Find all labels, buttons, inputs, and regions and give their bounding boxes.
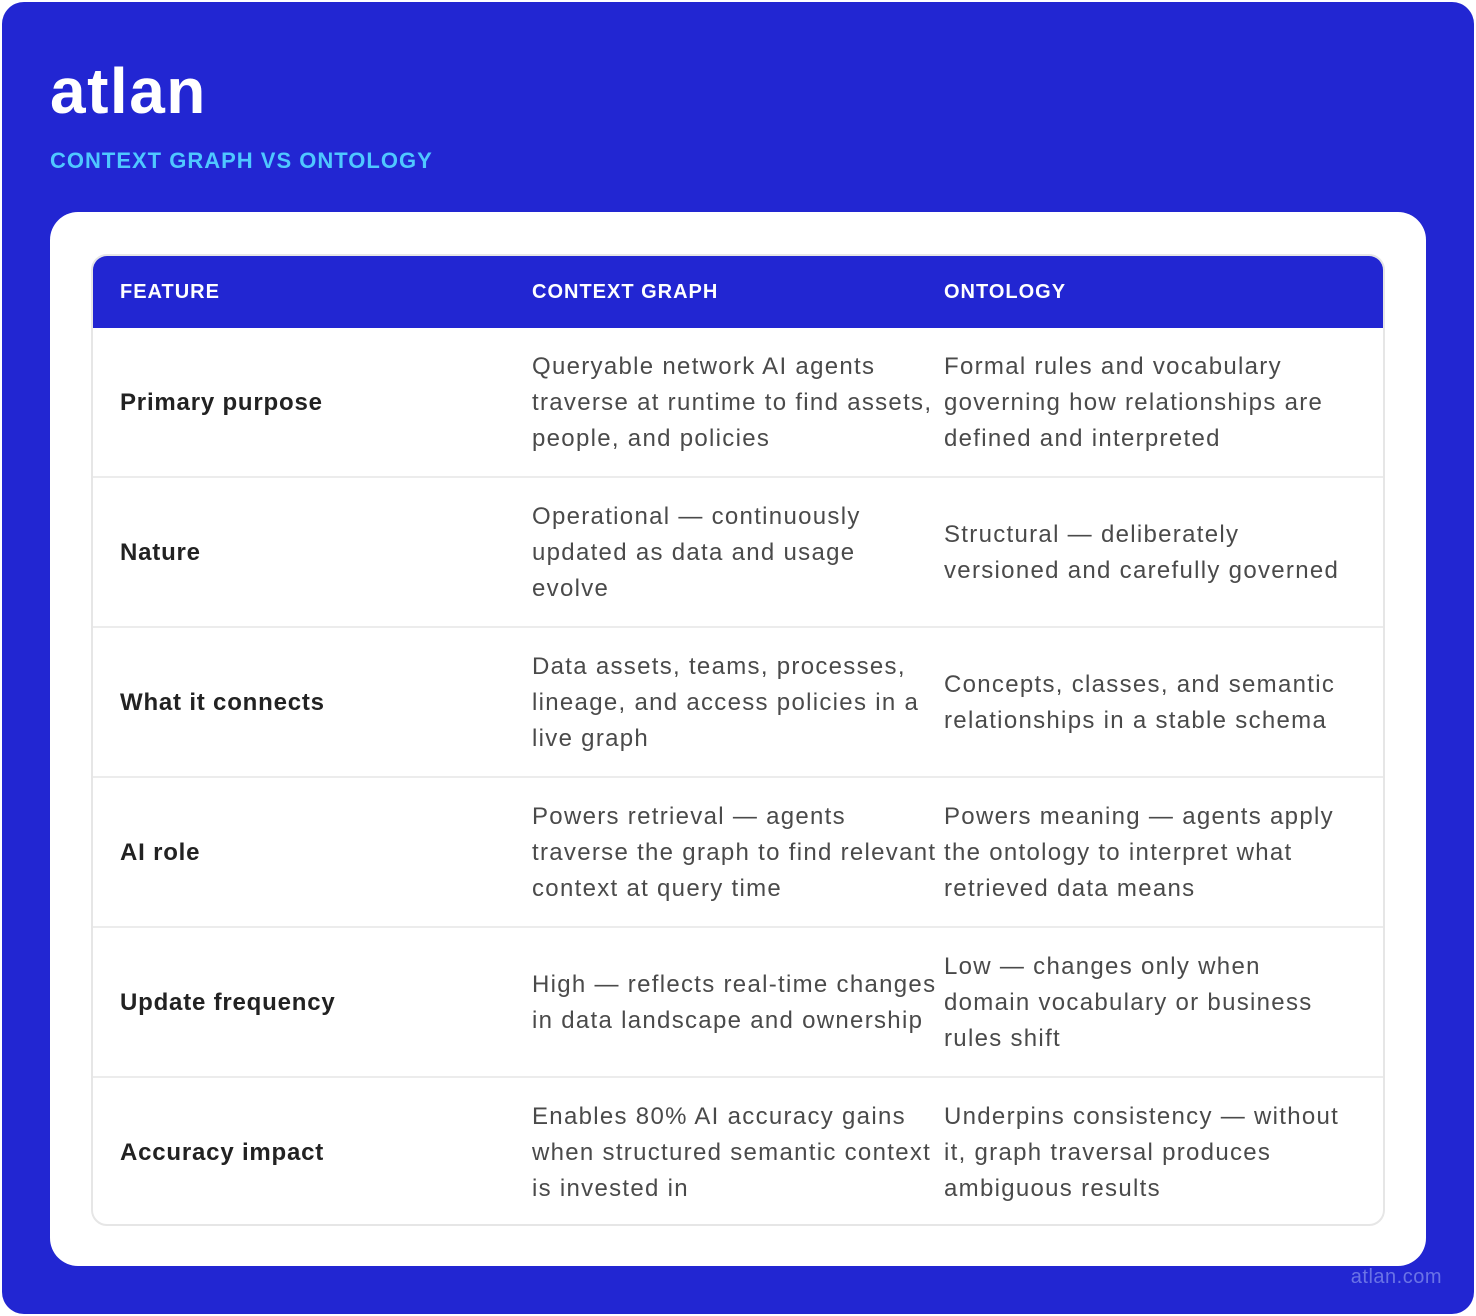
row: what it connects: What it connects — [120, 689, 325, 716]
subtitle: CONTEXT GRAPH VS ONTOLOGY — [50, 148, 433, 173]
row: accuracy impact: when structured semantic context — [532, 1139, 931, 1166]
row: update frequency: Update frequency — [120, 989, 336, 1016]
row: update frequency: Low — changes only when — [944, 953, 1261, 980]
row: AI role — [93, 776, 1383, 926]
row: accuracy impact: ambiguous results — [944, 1175, 1161, 1202]
row: nature: updated as data and usage — [532, 539, 855, 566]
row: accuracy impact: Enables 80% AI accuracy gains — [532, 1103, 906, 1130]
row: what it connects: relationships in a stable schema — [944, 707, 1327, 734]
comparison table — [91, 254, 1385, 1226]
row: AI role: Powers meaning — agents apply — [944, 803, 1334, 830]
row: update frequency — [93, 926, 1383, 1076]
row: what it connects: Concepts, classes, and semantic — [944, 671, 1335, 698]
table header: FEATURE — [120, 281, 220, 303]
row: primary purpose: Primary purpose — [120, 389, 323, 416]
row: nature — [93, 476, 1383, 626]
row: AI role: the ontology to interpret what — [944, 839, 1293, 866]
row: primary purpose — [120, 353, 1323, 452]
row: AI role: AI role — [120, 839, 200, 866]
row: update frequency: rules shift — [944, 1025, 1061, 1052]
row: primary purpose: defined and interpreted — [944, 425, 1221, 452]
row: nature: Operational — continuously — [532, 503, 861, 530]
table header: CONTEXT GRAPH — [532, 281, 718, 303]
row: accuracy impact — [93, 1076, 1383, 1226]
row: AI role: Powers retrieval — agents — [532, 803, 846, 830]
row: primary purpose: people, and policies — [532, 425, 770, 452]
row: primary purpose: Queryable network AI agents — [532, 353, 875, 380]
row: nature: versioned and carefully governed — [944, 557, 1339, 584]
row: what it connects: Data assets, teams, processes, — [532, 653, 906, 680]
row: accuracy impact: is invested in — [532, 1175, 689, 1202]
row: nature: Nature — [120, 539, 201, 566]
table header — [93, 256, 1383, 328]
row: AI role: traverse the graph to find relevant — [532, 839, 936, 866]
row: nature: evolve — [532, 575, 609, 602]
row: update frequency: in data landscape and ownership — [532, 1007, 923, 1034]
logo: atlan — [50, 55, 207, 127]
row: nature: Structural — deliberately — [944, 521, 1239, 548]
row: accuracy impact: Underpins consistency — without — [944, 1103, 1339, 1130]
white card — [50, 212, 1426, 1266]
row: update frequency: High — reflects real-time changes — [532, 971, 936, 998]
table header: ONTOLOGY — [944, 281, 1066, 303]
row: primary purpose: Formal rules and vocabulary — [944, 353, 1282, 380]
row: accuracy impact: it, graph traversal produces — [944, 1139, 1271, 1166]
row: AI role: context at query time — [532, 875, 782, 902]
row: primary purpose: traverse at runtime to find assets, — [532, 389, 932, 416]
row: accuracy impact: Accuracy impact — [120, 1139, 324, 1166]
row: what it connects: lineage, and access policies in a — [532, 689, 919, 716]
row: what it connects: live graph — [532, 725, 649, 752]
row: AI role: retrieved data means — [944, 875, 1195, 902]
row: update frequency: domain vocabulary or business — [944, 989, 1313, 1016]
footer url: atlan.com — [1351, 1266, 1442, 1288]
row: what it connects — [93, 626, 1383, 776]
row: primary purpose: governing how relationships are — [944, 389, 1323, 416]
